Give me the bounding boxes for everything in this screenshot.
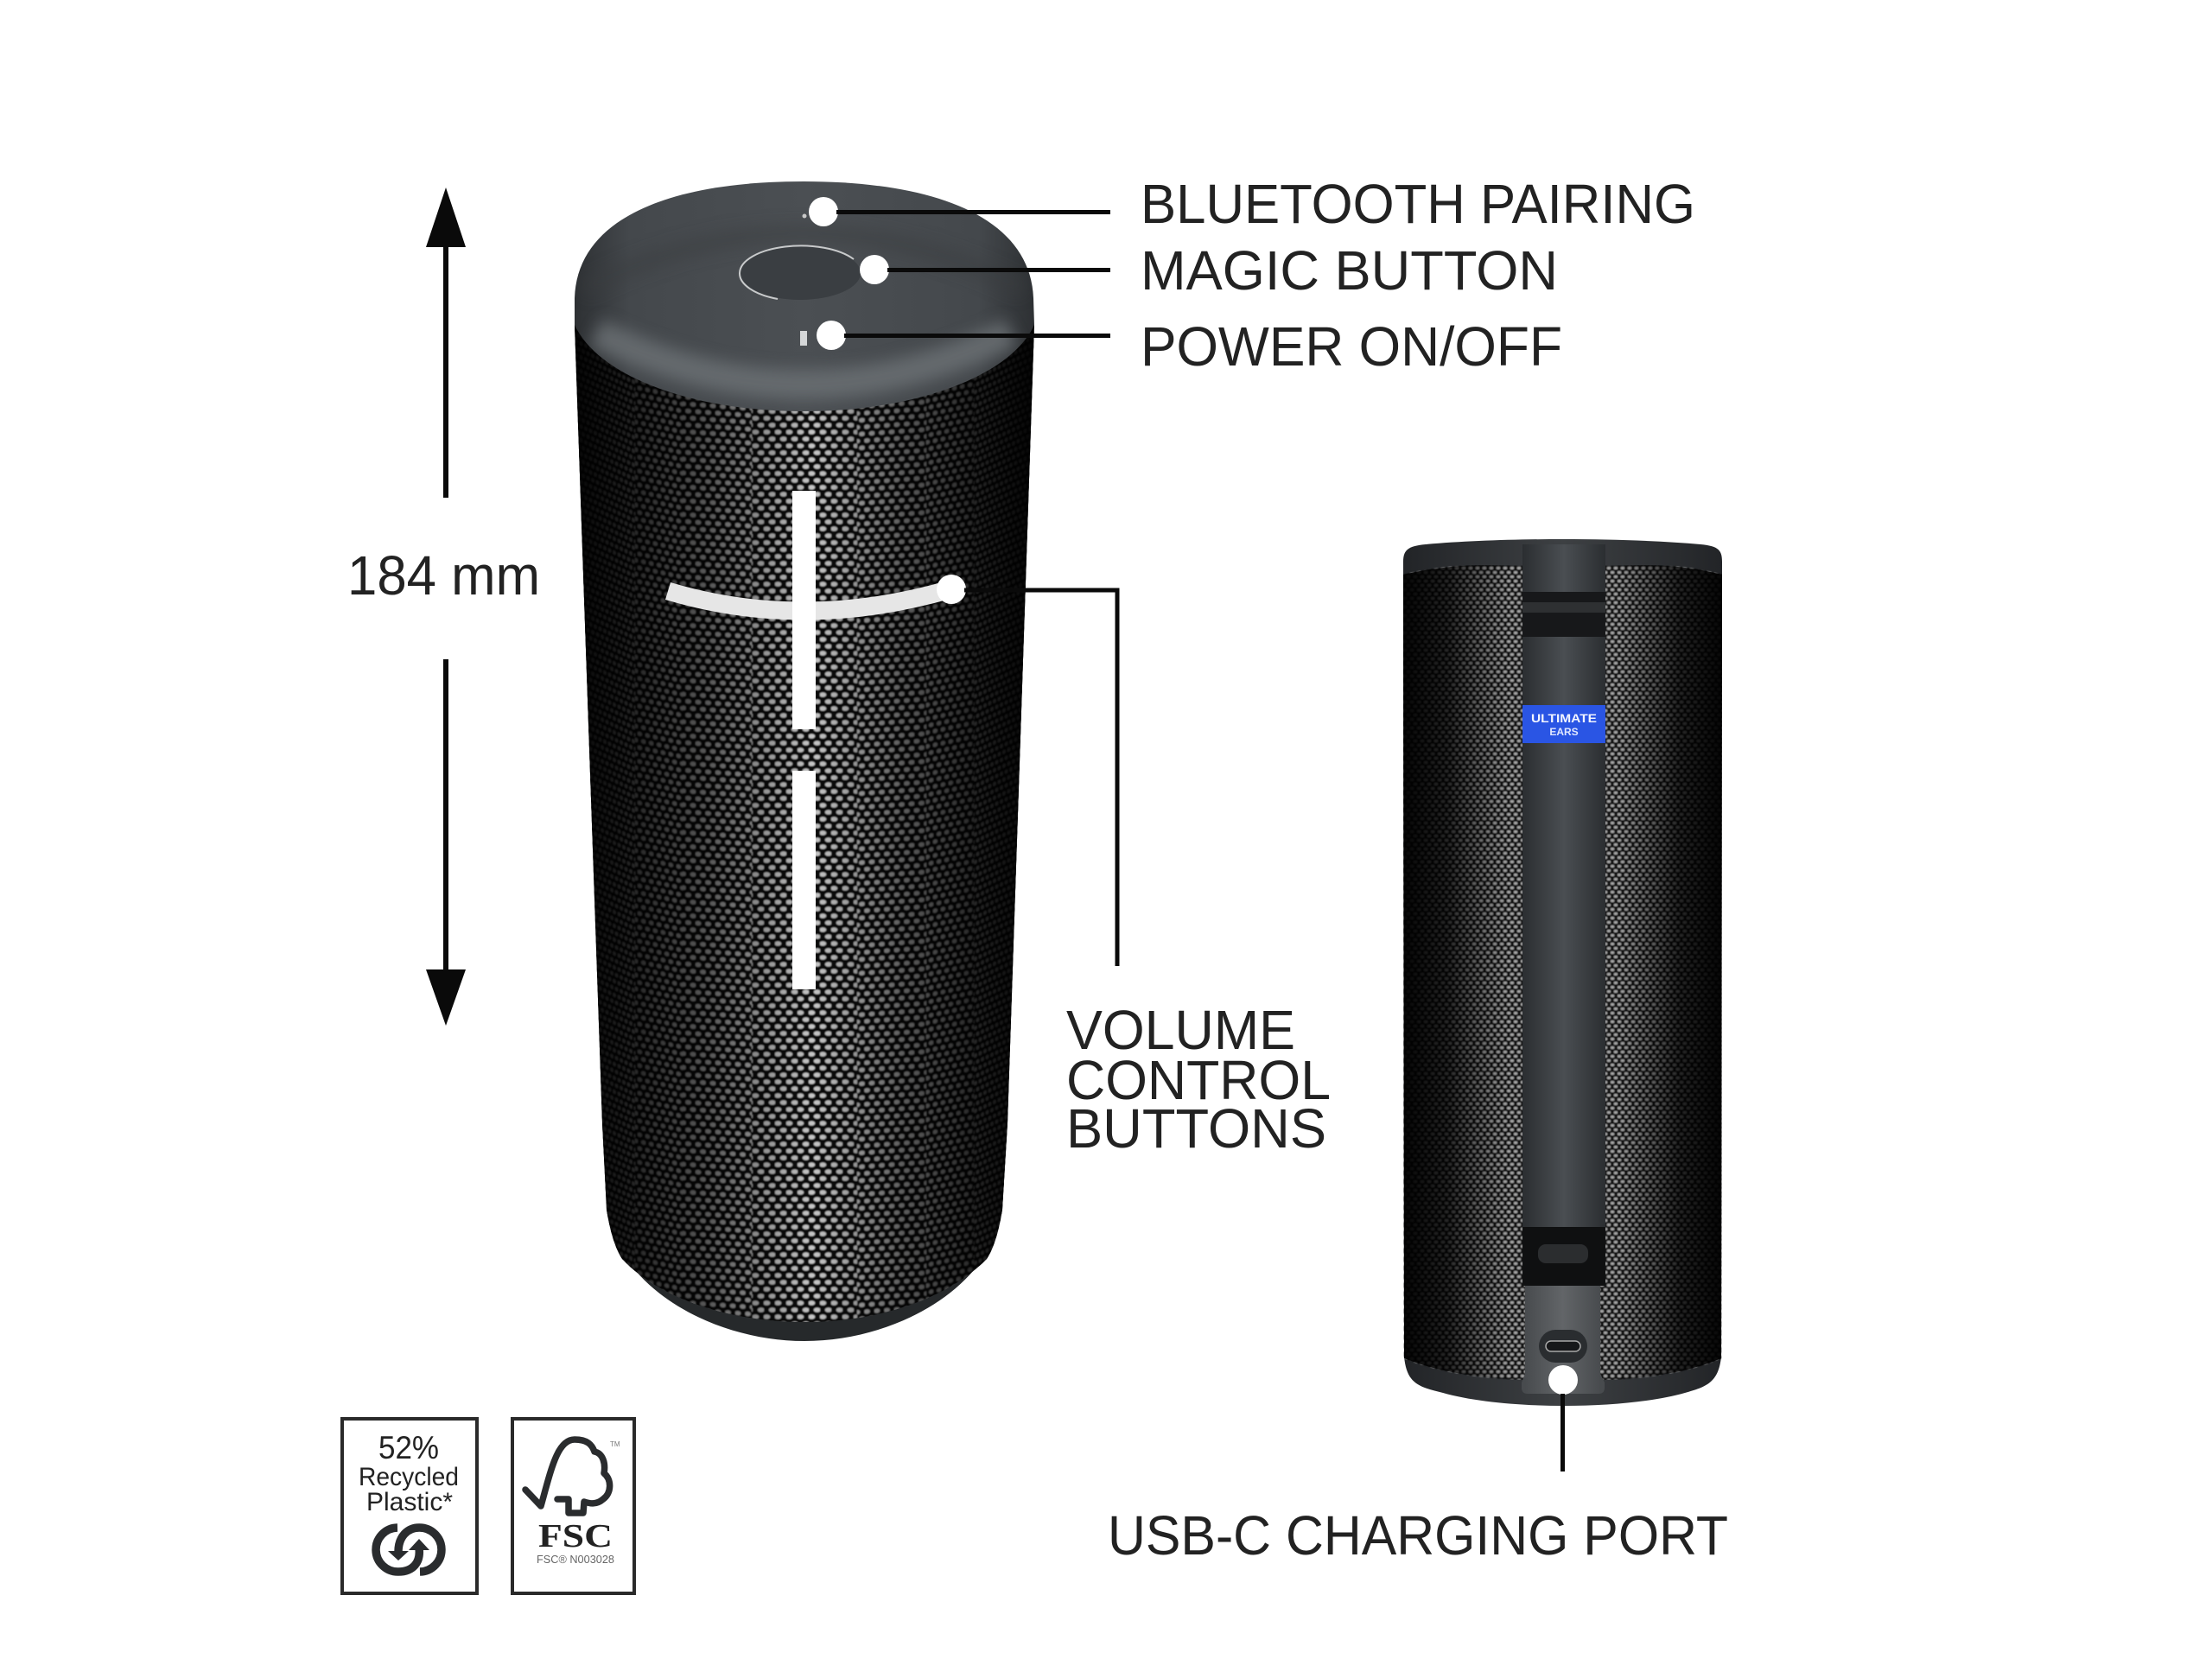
speaker top cap [570,177,1037,415]
dimension label: 184 mm [347,544,540,607]
callout: volume control buttons [937,575,1331,1160]
speaker grille [562,315,1046,1331]
badge: 52% recycled plastic [342,1419,477,1593]
callout: usb-c charging port [1108,1365,1728,1567]
callout: power on/off [817,315,1562,378]
callout: volume control buttons: VOLUME [1066,999,1295,1061]
strap lower clip [1522,1227,1605,1286]
strap [1522,544,1605,1227]
badge: 52% recycled plastic: Recycled [359,1463,459,1491]
callout: power on/off: POWER ON/OFF [1141,315,1562,378]
power switch [800,331,807,346]
back grille [1403,565,1722,1380]
callout: usb-c charging port: USB-C CHARGING PORT [1108,1504,1728,1567]
front speaker [562,177,1046,1341]
callout: magic button [860,239,1558,302]
badge: FSC [512,1419,634,1593]
badge: FSC: FSC® N003028 [537,1553,614,1566]
badge: FSC: FSC [538,1518,613,1554]
icon: check tree [525,1440,610,1513]
back speaker [1403,539,1722,1406]
callout: volume control buttons: CONTROL [1066,1049,1331,1111]
callout: magic button: MAGIC BUTTON [1141,239,1558,302]
back body [1403,539,1722,1406]
height dimension arrow [426,188,466,1026]
icon: recycle loop [376,1528,442,1572]
callout: bluetooth pairing [809,173,1695,235]
badge: ultimate ears: ULTIMATE [1531,711,1597,725]
bluetooth button [802,214,807,218]
port plate [1522,1286,1605,1394]
strap top loop [1522,592,1605,637]
badge: ultimate ears: EARS [1549,726,1579,738]
volume minus bar [792,771,816,989]
usb-c port [1539,1330,1587,1363]
magic button [740,245,861,300]
crossing cover [792,596,816,631]
badge: FSC: TM [610,1440,620,1448]
callout: bluetooth pairing: BLUETOOTH PAIRING [1141,173,1695,235]
speaker body [575,325,1034,1341]
badge: 52% recycled plastic: 52% [378,1430,439,1465]
volume horizontal bar [668,589,950,611]
volume plus vertical bar [792,491,816,729]
badge: 52% recycled plastic: Plastic* [366,1488,453,1516]
callout: volume control buttons: BUTTONS [1066,1097,1326,1160]
badge: ultimate ears [1522,705,1605,743]
